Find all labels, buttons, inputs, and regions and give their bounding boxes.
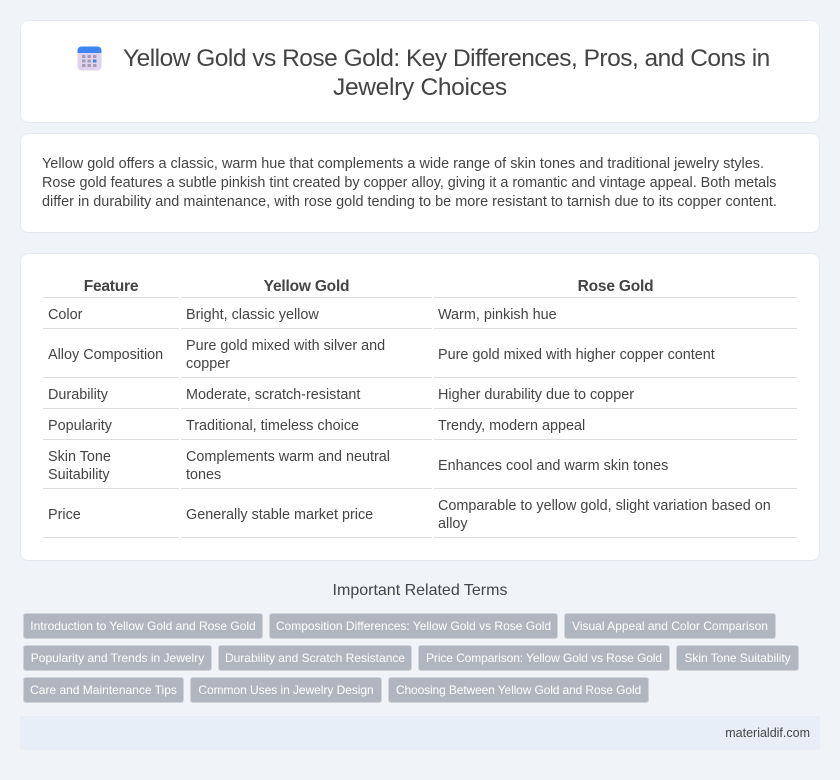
row: durability (48, 387, 634, 403)
row: skin tone suitability: Skin Tone (48, 449, 111, 465)
row: durability: Durability (48, 387, 108, 403)
row: skin tone suitability (48, 449, 668, 483)
row: skin tone suitability: tones (186, 467, 221, 483)
row: alloy composition: Alloy Composition (48, 347, 163, 363)
related terms tags (23, 613, 799, 703)
table header (84, 278, 653, 295)
panel: header (20, 20, 820, 123)
related terms heading: Important Related Terms (333, 582, 507, 599)
row: skin tone suitability: Suitability (48, 467, 110, 483)
row: durability: Moderate, scratch-resistant (186, 387, 360, 403)
row: price: Price (48, 507, 81, 523)
related terms tags: Composition Differences: Yellow Gold vs Rose Gold (276, 619, 551, 633)
intro paragraph: Yellow gold offers a classic, warm hue that complements a wide range of skin tones and traditional jewelry styles. (42, 156, 764, 172)
related terms tags: Introduction to Yellow Gold and Rose Gold (30, 619, 256, 633)
row: popularity (48, 418, 585, 434)
related terms tags: Visual Appeal and Color Comparison (572, 619, 768, 633)
row: popularity: Traditional, timeless choice (186, 418, 359, 434)
related terms tags: Skin Tone Suitability (684, 651, 791, 665)
row: durability: Higher durability due to copper (438, 387, 634, 403)
row: alloy composition: Pure gold mixed with higher copper content (438, 347, 715, 363)
related terms tags: Popularity and Trends in Jewelry (31, 651, 204, 665)
row: color (48, 307, 557, 323)
row: popularity: Trendy, modern appeal (438, 418, 585, 434)
icon: calendar (78, 46, 102, 70)
row: skin tone suitability: Complements warm and neutral (186, 449, 390, 465)
row: price: alloy (438, 516, 468, 532)
related terms tags: Durability and Scratch Resistance (225, 651, 405, 665)
title: Jewelry Choices (333, 74, 507, 101)
intro paragraph (42, 156, 777, 210)
related terms tags: Choosing Between Yellow Gold and Rose Gold (396, 683, 641, 697)
intro paragraph: differ in durability and maintenance, with rose gold tending to be more resistant to tarnish due to its copper content. (42, 194, 777, 210)
row: alloy composition: copper (186, 356, 230, 372)
row: skin tone suitability: Enhances cool and warm skin tones (438, 458, 668, 474)
panel: intro text (20, 133, 820, 233)
footer credit: materialdif.com (725, 726, 810, 740)
title: Yellow Gold vs Rose Gold: Key Differences, Pros, and Cons in (123, 45, 770, 72)
footer bar (20, 716, 820, 750)
row: price: Generally stable market price (186, 507, 373, 523)
row: alloy composition: Pure gold mixed with silver and (186, 338, 385, 354)
panel: comparison table (20, 253, 820, 561)
table header: Rose Gold (578, 278, 653, 295)
row: price: Comparable to yellow gold, slight variation based on (438, 498, 771, 514)
related terms tags: Common Uses in Jewelry Design (198, 683, 374, 697)
row: alloy composition (48, 338, 715, 372)
related terms tags: Price Comparison: Yellow Gold vs Rose Gold (426, 651, 662, 665)
table header: Feature (84, 278, 138, 295)
related terms tags: Care and Maintenance Tips (30, 683, 177, 697)
title (123, 45, 770, 101)
row: popularity: Popularity (48, 418, 112, 434)
row: color: Warm, pinkish hue (438, 307, 557, 323)
table header: Yellow Gold (264, 278, 349, 295)
row: price (48, 498, 771, 532)
row: color: Bright, classic yellow (186, 307, 319, 323)
row: color: Color (48, 307, 82, 323)
intro paragraph: Rose gold features a subtle pinkish tint created by copper alloy, giving it a romantic and vintage appeal. Both metals (42, 175, 776, 191)
